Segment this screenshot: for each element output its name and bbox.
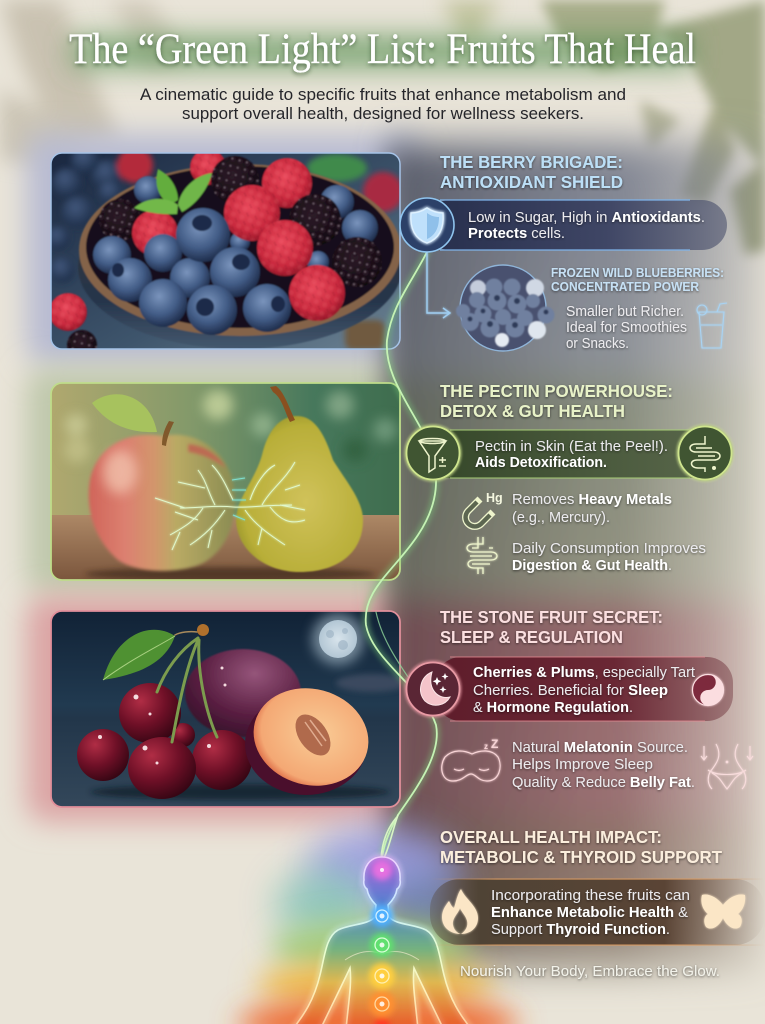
text: melatonin: Helps Improve Sleep (512, 757, 653, 773)
human figure with chakras (292, 857, 472, 1024)
section 3: heading: THE STONE FRUIT SECRET: (440, 607, 663, 627)
icon: gut (467, 537, 497, 574)
title: The “Green Light” List: Fruits That Heal (69, 26, 696, 73)
section 1: antioxidants pill: Protects cells. (468, 226, 565, 242)
icon: intestine circle (678, 426, 732, 480)
section 3: heading (440, 607, 663, 647)
icon: sleep mask: z (484, 742, 488, 751)
section 3: cherries pill: Cherries. Beneficial for Sleep (473, 683, 668, 699)
icon: magnet with Hg: Hg (486, 491, 503, 505)
frozen blueberries text (566, 304, 687, 352)
text: heavy metals: Removes Heavy Metals (512, 492, 672, 508)
frozen blueberries image (456, 265, 554, 351)
section 2: heading (440, 381, 673, 421)
subtitle (140, 85, 626, 123)
section 3: heading: SLEEP & REGULATION (440, 627, 623, 647)
section 2: heading: THE PECTIN POWERHOUSE: (440, 381, 673, 401)
section 3: cherries pill: & Hormone Regulation. (473, 700, 633, 716)
frozen blueberries text: or Snacks. (566, 336, 629, 352)
glowing green energy ribbon (366, 252, 437, 858)
frozen blueberries text: Smaller but Richer. (566, 304, 684, 320)
photo frame: berries (51, 153, 400, 349)
section 4: heading: OVERALL HEALTH IMPACT: (440, 827, 662, 847)
text: melatonin (512, 740, 695, 791)
text: digestion (512, 541, 706, 574)
section 4: metabolic pill: Enhance Metabolic Health & (491, 905, 688, 921)
photo: mixed berries in a bowl (52, 154, 400, 348)
text: melatonin: Natural Melatonin Source. (512, 740, 688, 756)
arrow: shield to frozen blueberries (427, 252, 450, 318)
icon: shield (400, 198, 454, 252)
subtitle: support overall health, designed for wellness seekers. (182, 104, 584, 123)
icon: sleep mask (442, 737, 500, 781)
section 2: heading: DETOX & GUT HEALTH (440, 401, 625, 421)
section 4: metabolic pill (430, 878, 765, 946)
closing tagline: Nourish Your Body, Embrace the Glow. (460, 964, 720, 980)
icon: yin yang (692, 674, 724, 706)
section 3: cherries pill: Cherries & Plums, especially Tart (473, 665, 695, 681)
frozen blueberries text: Ideal for Smoothies (566, 320, 687, 336)
text: heavy metals (512, 492, 672, 526)
frozen blueberries heading: FROZEN WILD BLUEBERRIES: (551, 266, 724, 280)
frozen blueberries heading (551, 266, 724, 294)
frozen blueberries heading: CONCENTRATED POWER (551, 280, 699, 294)
icon: smoothie glass (697, 303, 727, 348)
section 1: heading: THE BERRY BRIGADE: (440, 152, 623, 172)
text: digestion: Daily Consumption Improves (512, 541, 706, 557)
section 1: heading (440, 152, 623, 192)
text: digestion: Digestion & Gut Health. (512, 558, 672, 574)
text: heavy metals: (e.g., Mercury). (512, 510, 610, 526)
icon: funnel (406, 426, 460, 480)
section 1: antioxidants pill: Low in Sugar, High in Antioxidants. (468, 210, 705, 226)
section 2: pectin band: Aids Detoxification. (475, 455, 607, 471)
icon: flame (442, 889, 478, 934)
section 1: heading: ANTIOXIDANT SHIELD (440, 172, 623, 192)
icon: moon and stars (406, 662, 460, 716)
section 2: pectin band: Pectin in Skin (Eat the Peel!). (475, 439, 668, 455)
icon: waist (701, 744, 753, 789)
icon: sleep mask: Z (491, 737, 498, 751)
text: melatonin: Quality & Reduce Belly Fat. (512, 775, 695, 791)
section 4: metabolic pill: Support Thyroid Function. (491, 922, 670, 938)
section 3: cherries pill (435, 657, 733, 721)
section 1: antioxidants pill (425, 200, 727, 250)
section 4: heading (440, 827, 722, 867)
photo: cherries and plums under the moon (51, 611, 408, 807)
subtitle: A cinematic guide to specific fruits that enhance metabolism and (140, 85, 626, 104)
icon: butterfly (701, 894, 745, 929)
photo: apple and pear with glowing veins (51, 383, 400, 581)
section 4: heading: METABOLIC & THYROID SUPPORT (440, 847, 722, 867)
section 2: pectin band (440, 430, 705, 478)
icon: magnet with Hg (466, 491, 503, 526)
photo frame: apple and pear (51, 383, 400, 580)
section 4: metabolic pill: Incorporating these fruits can (491, 888, 690, 904)
photo frame: cherries and plums (51, 611, 400, 807)
